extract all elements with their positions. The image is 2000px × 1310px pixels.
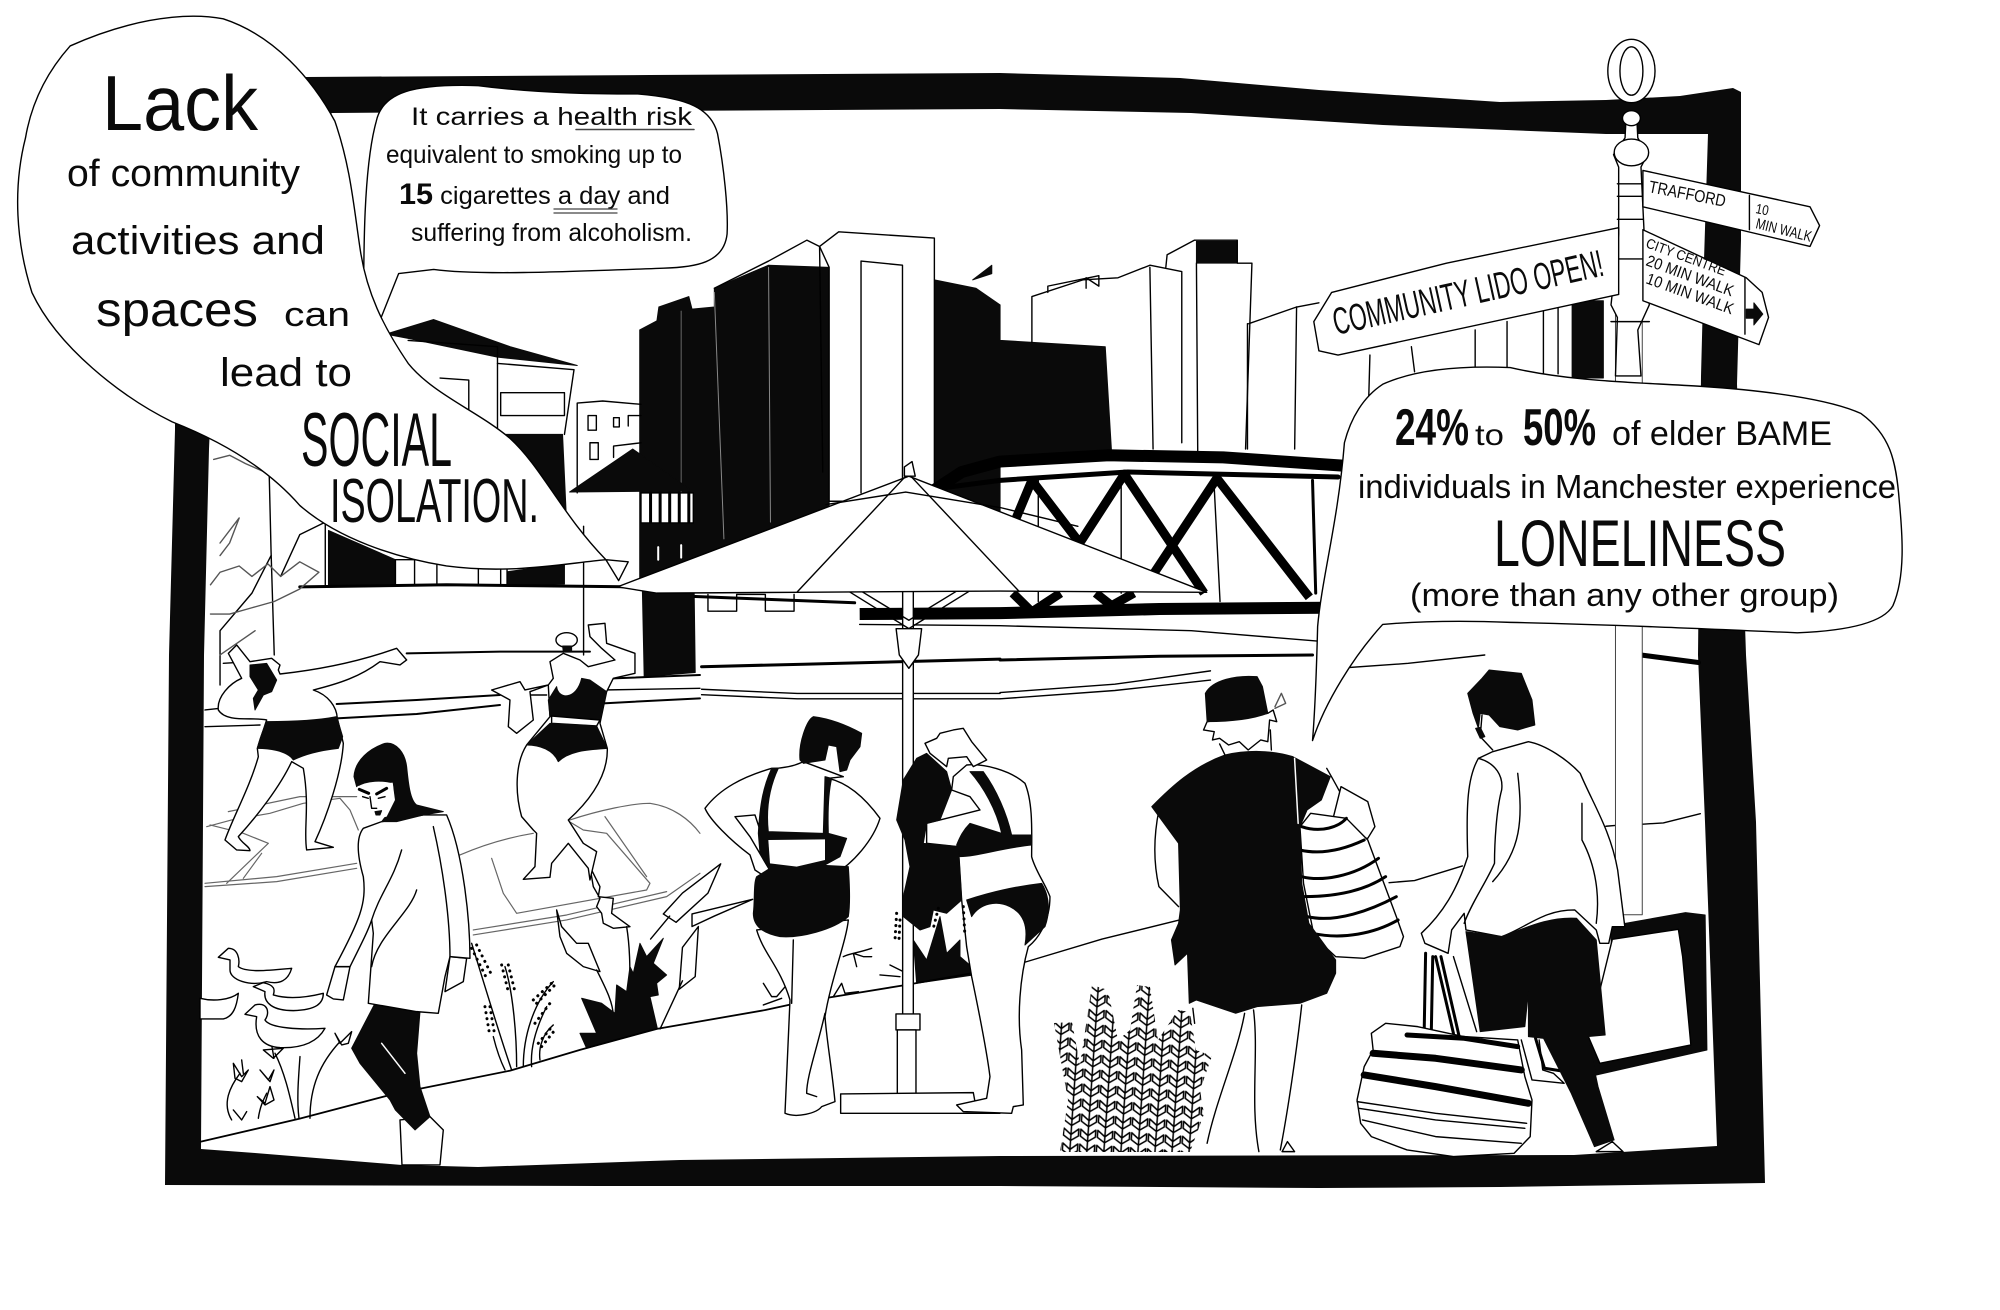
speech bubble: social isolation: spaces xyxy=(96,284,258,337)
tree at far left xyxy=(210,455,325,685)
speech bubble: loneliness statistics: 50% xyxy=(1523,399,1596,457)
speech bubble: loneliness statistics: (more than any other group) xyxy=(1410,577,1839,613)
speech bubble: loneliness statistics: of elder BAME xyxy=(1612,415,1832,453)
speech bubble: loneliness statistics xyxy=(1313,367,1902,741)
ducks xyxy=(200,948,325,1048)
speech bubble: social isolation: can xyxy=(284,296,350,334)
umbrella pole and base xyxy=(841,590,1000,1113)
black hand-drawn frame xyxy=(165,73,1765,1188)
woman in black swimsuit, back view xyxy=(705,717,880,1115)
speech bubble: social isolation: lead to xyxy=(220,351,352,395)
speech bubble: loneliness statistics: LONELINESS xyxy=(1494,506,1786,580)
sign: Trafford 10 min walk: 10 xyxy=(1754,200,1770,218)
railway bridge with truss xyxy=(860,455,1344,641)
speech bubble: health risk: equivalent to smoking up to xyxy=(386,141,682,169)
person in black dress with striped bag xyxy=(1152,676,1403,1152)
speech bubble: health risk: It carries a health risk xyxy=(411,103,693,131)
sign: Trafford 10 min walk xyxy=(1643,170,1820,246)
ground line xyxy=(201,972,976,1142)
underline: a day xyxy=(554,209,617,213)
rosemary bush xyxy=(1054,985,1212,1152)
lido wall and pool edge xyxy=(205,652,700,727)
speech bubble: social isolation: of community xyxy=(67,153,300,195)
wall lines under the parasol xyxy=(695,594,1000,699)
speech bubble: health risk: 15 cigarettes a day and xyxy=(399,178,670,211)
speech bubble: health risk xyxy=(364,85,727,322)
woman embracing, black towel xyxy=(897,728,1050,1113)
icon: arrow on sign xyxy=(1746,303,1763,325)
speech bubble: social isolation xyxy=(18,16,628,581)
paddleboards on the water xyxy=(205,797,700,935)
speech bubble: loneliness statistics: to xyxy=(1475,419,1504,452)
sign: community lido open: COMMUNITY LIDO OPEN! xyxy=(1329,243,1607,344)
sign: community lido open xyxy=(1314,228,1619,355)
wall lines, right side xyxy=(1000,655,1700,962)
swimmer in black bikini xyxy=(492,623,635,880)
speech bubble: social isolation: activities and xyxy=(71,219,325,263)
emphasis: social isolation xyxy=(301,398,539,536)
speech bubble: health risk: suffering from alcoholism. xyxy=(411,219,692,247)
sign: Trafford 10 min walk: MIN WALK xyxy=(1754,215,1813,246)
waterside leaves, right xyxy=(651,864,753,1029)
emphasis: social isolation: ISOLATION. xyxy=(330,467,539,536)
large parasol xyxy=(617,462,1207,668)
speech bubble: social isolation: Lack xyxy=(102,59,259,147)
woman in hijab walking xyxy=(327,743,470,1165)
signpost pole xyxy=(1608,39,1655,915)
speech bubble: loneliness statistics: individuals in Manchester experience xyxy=(1358,468,1896,505)
background buildings, right xyxy=(1000,240,1603,459)
speech bubble: loneliness statistics: 24% xyxy=(1395,399,1469,457)
kiosk tower with black roof xyxy=(570,449,695,677)
sign: city centre walking times: 10 MIN WALK xyxy=(1644,271,1736,318)
person in white shirt carrying bags xyxy=(1421,670,1707,1152)
waterside plants: reeds, flowers and black bush xyxy=(227,867,667,1120)
swimmer, back view, arms raised xyxy=(218,645,407,851)
striped beach bag xyxy=(1357,953,1532,1157)
background buildings, left and centre xyxy=(300,232,1000,655)
sign: city centre walking times: CITY CENTRE xyxy=(1644,235,1728,279)
sign: city centre walking times xyxy=(1643,230,1769,345)
emphasis: social isolation: SOCIAL xyxy=(301,398,452,483)
sign: Trafford 10 min walk: TRAFFORD xyxy=(1647,177,1727,211)
plant behind the embracing women xyxy=(763,913,973,1005)
underline: health risk xyxy=(576,128,694,130)
sign: city centre walking times: 20 MIN WALK xyxy=(1644,253,1736,300)
